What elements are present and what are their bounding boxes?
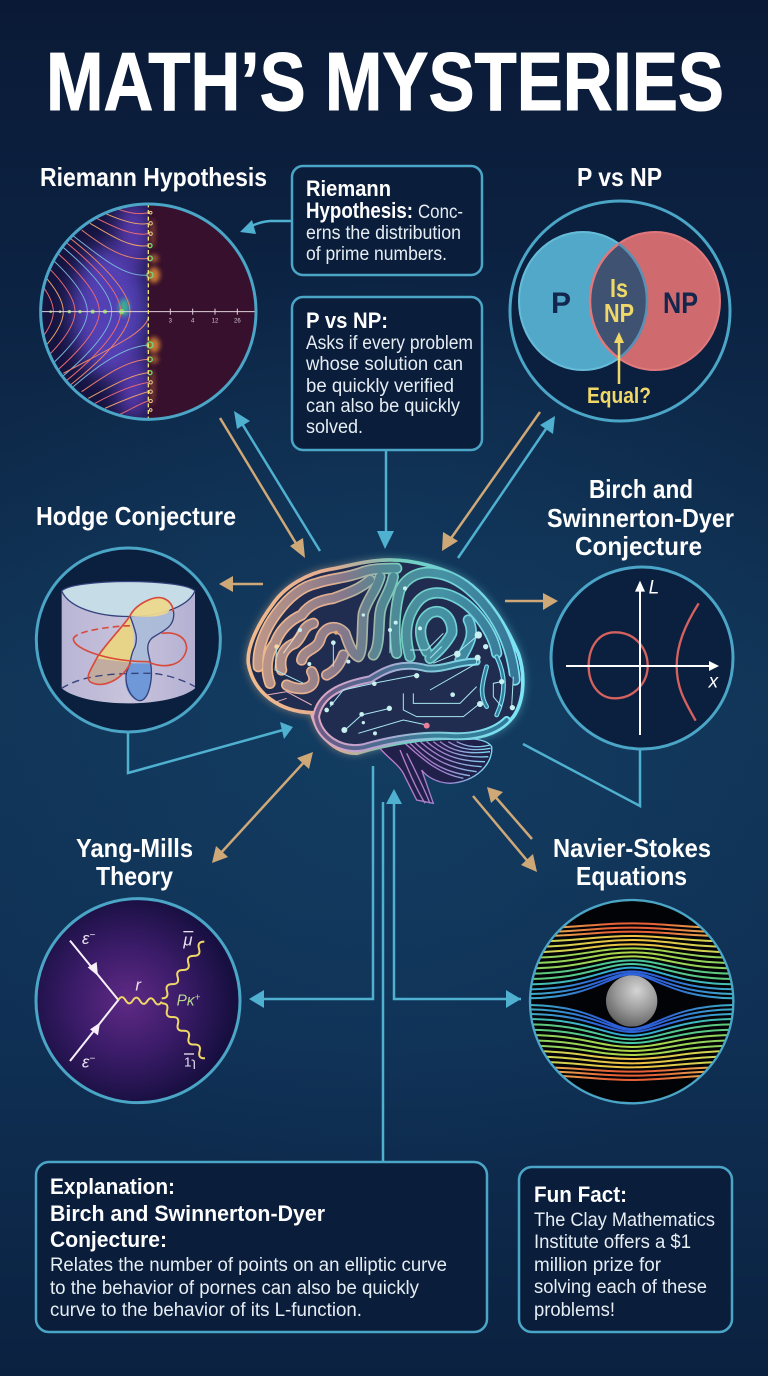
arrow: P vs NP box to brain [377, 450, 394, 549]
heading: Yang-Mills Theory [76, 833, 193, 891]
temporal lobe [316, 657, 513, 748]
chart: Riemann zeta plot circle: 12 [212, 319, 219, 325]
heading: Birch and Swinnerton-Dyer Conjecture: Conjecture [575, 531, 702, 561]
panel: explanation box: Explanation: [50, 1174, 175, 1199]
lower streamlines [527, 1005, 737, 1080]
panel: fun fact box [519, 1167, 732, 1332]
arrow: Riemann box to Riemann circle [240, 220, 292, 234]
heading: Hodge Conjecture: Hodge Conjecture [36, 501, 236, 531]
label: Equal?: Equal? [587, 383, 651, 408]
arrow: blue to P vs NP circle [458, 416, 555, 558]
panel: Riemann Hypothesis box: erns the distribution [306, 223, 461, 244]
particle labels: 1ɿ [184, 1055, 196, 1070]
chart: P vs NP Venn diagram circle [510, 201, 730, 421]
panel: P vs NP box: be quickly verified [306, 376, 454, 397]
brain glow [248, 560, 523, 753]
cerebrum [248, 560, 523, 753]
panel: P vs NP box: solved. [306, 417, 363, 438]
panel: fun fact box: The Clay Mathematics [534, 1210, 715, 1231]
illustration: glowing circuit brain [248, 560, 523, 803]
label: Is NP: Is [610, 273, 628, 303]
chart: Riemann zeta plot circle [39, 202, 258, 421]
particle labels: r [135, 976, 142, 995]
panel: fun fact box: Institute offers a $1 [534, 1232, 691, 1253]
chart: Riemann zeta plot circle: 3 [169, 319, 173, 325]
panel: fun fact box: solving each of these [534, 1277, 707, 1298]
panel: fun fact box: Fun Fact: [534, 1182, 627, 1207]
intersection lens [588, 243, 648, 359]
particle labels: + [195, 993, 201, 1004]
arrow: Hodge connector to brain [128, 722, 293, 773]
particle labels: ε [82, 1052, 89, 1071]
panel: Riemann Hypothesis box: Riemann [306, 176, 391, 201]
connector: Birch and Swinnerton-Dyer to brain [523, 744, 640, 806]
particle labels: ε [82, 929, 89, 948]
chart: Riemann zeta plot circle: 4 [191, 319, 195, 325]
wavy boson lines [118, 942, 205, 1058]
sphere [606, 975, 657, 1027]
panel: explanation box: curve to the behavior of its L-function. [50, 1300, 362, 1321]
chart: Riemann zeta plot circle: 26 [234, 319, 241, 325]
label: NP: NP [663, 287, 698, 320]
heading: Birch and Swinnerton-Dyer Conjecture [547, 474, 734, 561]
arrow: tan brain to Riemann [220, 418, 305, 558]
panel: P vs NP box: Asks if every problem [306, 333, 473, 354]
panel: Riemann Hypothesis box [292, 166, 482, 275]
panel: explanation box: Birch and Swinnerton-Dyer [50, 1201, 325, 1226]
particle labels: − [89, 930, 95, 941]
panel: explanation box: Relates the number of points on an elliptic curve [50, 1255, 447, 1276]
chart: Feynman diagram circle [36, 899, 240, 1103]
gyri folds [258, 568, 515, 689]
arrows: paired tan Navier-Stokes and brain [473, 787, 537, 872]
arrow: center line to brain and Navier-Stokes [386, 789, 521, 1008]
upper streamlines [527, 923, 737, 998]
axis label x: x [708, 671, 720, 692]
heading: Riemann Hypothesis: Riemann Hypothesis [40, 162, 267, 192]
panel: P vs NP box: whose solution can [305, 354, 463, 375]
arrow: brain to Birch and Swinnerton-Dyer [505, 593, 558, 610]
panel: Riemann Hypothesis box: Hypothesis: [306, 198, 413, 223]
arrowheads [88, 962, 100, 1035]
particle labels: − [89, 1053, 95, 1064]
heading: Navier-Stokes Equations [553, 833, 711, 891]
panel: Riemann Hypothesis box: Conc- [418, 202, 463, 223]
arrow: equal pointer [614, 332, 624, 384]
panel: P vs NP box: can also be quickly [306, 396, 460, 417]
heading: Navier-Stokes Equations: Equations [576, 861, 687, 891]
particle labels: Pκ [177, 992, 195, 1009]
particle lines [70, 941, 118, 1061]
chart: elliptic curve circle [551, 567, 733, 749]
arrow: brain to Hodge [219, 576, 263, 592]
particle labels [82, 929, 201, 1071]
panel: P vs NP box [292, 297, 482, 450]
arrow: center line to Yang-Mills [249, 766, 373, 1008]
panel: explanation box [36, 1162, 487, 1332]
panel: P vs NP box: P vs NP: [306, 308, 388, 333]
circuit traces [267, 630, 513, 733]
heading: Yang-Mills Theory: Theory [96, 861, 173, 891]
arrow: tan from P vs NP to brain [442, 412, 540, 551]
axis arrowheads [635, 581, 719, 671]
panel: fun fact box: problems! [534, 1300, 615, 1321]
axis label L: L [649, 577, 659, 598]
red elliptic curve [589, 603, 699, 721]
arrow: blue to Riemann circle [234, 411, 320, 551]
circuit nodes [274, 586, 515, 735]
label: P: P [551, 287, 571, 320]
panel: explanation box: Conjecture: [50, 1227, 167, 1252]
label: Is NP: NP [604, 298, 634, 328]
panel: explanation box: to the behavior of pornes can also be quickly [50, 1278, 419, 1299]
heading: Navier-Stokes Equations: Navier-Stokes [553, 833, 711, 863]
P set [519, 232, 647, 370]
panel: Riemann Hypothesis box: of prime numbers. [306, 244, 447, 265]
axes [566, 590, 712, 735]
label: Is NP [604, 273, 634, 328]
particle labels: μ [182, 930, 192, 949]
heading: Birch and Swinnerton-Dyer Conjecture: Birch and [589, 474, 693, 504]
chart: Navier-Stokes streamlines circle [527, 900, 737, 1103]
heading: Birch and Swinnerton-Dyer Conjecture: Swinnerton-Dyer [547, 503, 734, 533]
heading: Yang-Mills Theory: Yang-Mills [76, 833, 193, 863]
chart: Hodge cylinder circle [36, 548, 220, 732]
panel: fun fact box: million prize for [534, 1255, 662, 1276]
arrow: double tan Yang-Mills and brain [212, 752, 313, 863]
connector: explanation box to brain [382, 802, 384, 1162]
NP set [590, 232, 720, 370]
cerebellum [380, 738, 492, 803]
heading: P vs NP: P vs NP [577, 162, 662, 192]
